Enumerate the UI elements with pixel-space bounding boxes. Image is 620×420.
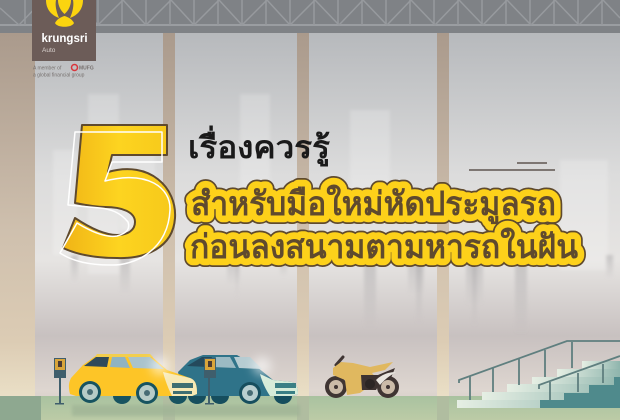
wheels xyxy=(239,382,261,404)
tagline: MUFG xyxy=(79,66,94,72)
subtitle text: ก่อนลงสนามตามหารถในฝัน xyxy=(190,227,578,265)
floor xyxy=(0,396,620,420)
tagline xyxy=(33,64,94,78)
back railing xyxy=(459,341,620,400)
columns xyxy=(0,33,449,396)
nose xyxy=(163,372,197,396)
sign post right xyxy=(204,358,216,404)
yellow car xyxy=(69,354,197,404)
roof truss xyxy=(0,0,620,33)
body xyxy=(178,355,298,396)
logo wordmark: krungsri xyxy=(42,33,88,45)
tagline: a global financial group xyxy=(33,72,85,78)
subtitle text: สำหรับมือใหม่หัดประมูลรถ xyxy=(191,184,556,225)
logo sublabel: Auto xyxy=(42,47,56,54)
motorcycle xyxy=(325,357,399,398)
windows xyxy=(84,357,109,367)
subtitle line 2 backing: ก่อนลงสนามตามหารถในฝัน xyxy=(190,227,578,265)
nose xyxy=(260,374,298,396)
windows xyxy=(187,357,212,367)
body xyxy=(69,355,197,396)
faint city skyline xyxy=(53,94,613,335)
teal car xyxy=(178,355,298,404)
subtitle line 2 backing: ก่อนลงสนามตามหารถในฝัน xyxy=(190,227,578,265)
front railing xyxy=(539,356,620,400)
icon: krungsri emblem xyxy=(46,0,83,27)
yellow subtitle block xyxy=(190,184,578,265)
tyres under car xyxy=(188,388,292,404)
wheels xyxy=(79,381,101,403)
steps xyxy=(457,361,620,408)
tyres under car xyxy=(113,388,187,404)
numeral 5 xyxy=(60,125,175,265)
white outline xyxy=(60,132,170,265)
decorative lines right of subtitle xyxy=(469,162,555,171)
subtitle line 1 backing: สำหรับมือใหม่หัดประมูลรถ xyxy=(191,184,556,225)
subtitle text xyxy=(190,184,578,265)
logo: krungsri Auto xyxy=(32,0,96,78)
tagline: A member of xyxy=(33,66,62,72)
subtitle line 1 backing: สำหรับมือใหม่หัดประมูลรถ xyxy=(191,184,556,225)
sign post left xyxy=(54,358,66,404)
staircase xyxy=(457,341,620,408)
heading: เรื่องควรรู้: เรื่องควรรู้ xyxy=(188,125,330,167)
